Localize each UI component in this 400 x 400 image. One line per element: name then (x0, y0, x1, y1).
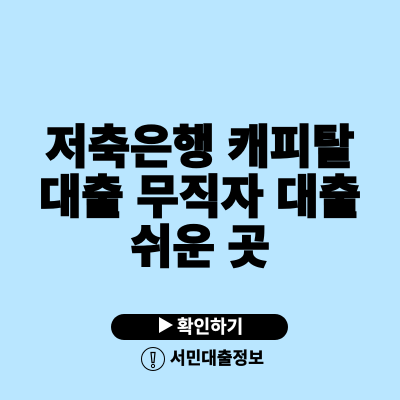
brand label: 서민대출정보 (170, 349, 264, 368)
title (39, 121, 361, 273)
button label: 확인하기 (177, 317, 243, 337)
icon: play triangle (159, 317, 173, 333)
title: 대출 무직자 대출 (39, 171, 361, 223)
title: 저축은행 캐피탈 (45, 121, 355, 173)
icon: exclamation circle (141, 347, 165, 371)
title: 쉬운 곳 (130, 221, 270, 273)
button: confirm (111, 314, 288, 340)
